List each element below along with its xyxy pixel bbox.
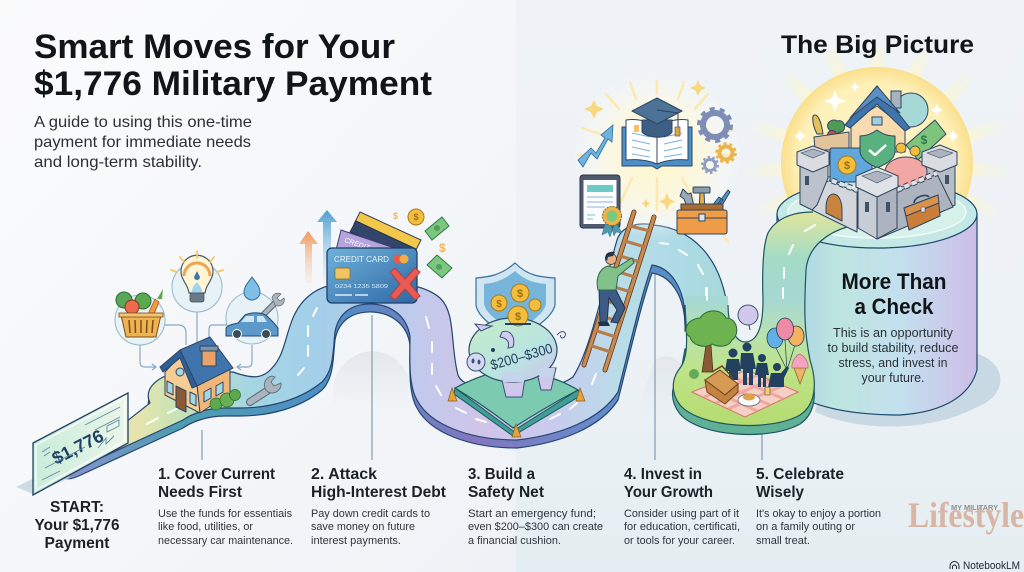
icon: coins and cash: $ bbox=[439, 241, 446, 255]
step 1 illustration: needs bbox=[115, 251, 284, 413]
step 4 text: for education, certificati, bbox=[624, 521, 740, 533]
step 5 illustration: picnic bbox=[686, 305, 808, 417]
icon: groceries circle bbox=[115, 289, 165, 345]
subtitle: payment for immediate needs bbox=[34, 134, 251, 151]
icon: house bbox=[160, 337, 233, 413]
logo: my military lifestyle: MY MILITARY bbox=[951, 505, 998, 512]
right tower top bbox=[922, 145, 957, 184]
step 2 text: save money on future bbox=[311, 521, 415, 533]
step 3 text: a financial cushion. bbox=[468, 535, 561, 547]
step 5 text: on a family outing or bbox=[756, 521, 855, 533]
text: more than a check description: stress, and invest in bbox=[838, 356, 948, 370]
subtitle: A guide to using this one-time bbox=[34, 114, 252, 131]
glow rays bbox=[578, 81, 736, 242]
icon: utility bulb bbox=[171, 251, 223, 312]
step 3 text: Start an emergency fund; bbox=[468, 508, 596, 520]
castle walls bbox=[812, 176, 857, 232]
step 2 illustration: credit cards bbox=[299, 209, 452, 303]
step 3 text bbox=[468, 466, 603, 547]
step 5 text bbox=[756, 466, 881, 547]
title bbox=[34, 28, 432, 103]
icon: toolbox bbox=[677, 187, 730, 234]
road: picnic bend rising to the castle bbox=[672, 212, 847, 434]
text: more than a check description: your future. bbox=[862, 371, 924, 385]
shield on castle bbox=[860, 130, 895, 168]
icon: shield bbox=[476, 263, 555, 340]
icon: red x bbox=[390, 268, 420, 300]
title: $1,776 Military Payment bbox=[34, 65, 432, 103]
step 1 text: 1. Cover Current bbox=[158, 466, 275, 483]
icon: basket and food bbox=[705, 366, 770, 406]
arrows into house bbox=[140, 312, 252, 370]
road: winding path bbox=[65, 224, 728, 479]
heading: more than a check: a Check bbox=[854, 294, 934, 319]
blue balloon and cash bbox=[894, 93, 946, 160]
icon: graduation cap bbox=[632, 98, 682, 137]
icon: open book bbox=[622, 119, 692, 169]
icon: speech bubble bbox=[738, 305, 758, 330]
icon: picnic blanket bbox=[692, 370, 798, 417]
icon: family silhouettes bbox=[725, 342, 789, 387]
icon: car and water bbox=[226, 277, 284, 344]
step 1 text: necessary car maintenance. bbox=[158, 535, 293, 547]
step 5 text: 5. Celebrate bbox=[756, 466, 844, 483]
notebooklm mark: NotebookLM bbox=[963, 560, 1020, 572]
icon: sparkles bbox=[584, 80, 706, 210]
icon: piggy bank: $ bbox=[515, 311, 521, 323]
step 5 text: small treat. bbox=[756, 535, 810, 547]
step 2 text: 2. Attack bbox=[311, 466, 377, 483]
title: Smart Moves for Your bbox=[34, 28, 395, 66]
icon: coins and cash: $ bbox=[413, 212, 419, 222]
house on top bbox=[845, 86, 910, 152]
icon: coins and cash bbox=[393, 209, 452, 278]
icon: pillow bbox=[448, 368, 585, 437]
text: more than a check description: to build stability, reduce bbox=[828, 341, 959, 355]
blue balloon and cash: $ bbox=[921, 133, 928, 147]
step 5 text: It's okay to enjoy a portion bbox=[756, 508, 881, 520]
icon: cheque: $1,776 bbox=[49, 426, 107, 469]
step 4 text: or tools for your career. bbox=[624, 535, 735, 547]
icon: tablet certificate bbox=[580, 175, 622, 237]
step 4 text: Your Growth bbox=[624, 484, 713, 501]
blue panel with coin bbox=[830, 148, 872, 182]
step 4 text: Consider using part of it bbox=[624, 508, 739, 520]
icon: gears bbox=[699, 109, 736, 173]
back right tower bbox=[925, 165, 955, 215]
icon: cheque bbox=[16, 393, 128, 495]
step 4 illustration: growth bbox=[572, 70, 742, 370]
icon: shield: $ bbox=[517, 288, 523, 300]
icon: piggy bank bbox=[467, 306, 565, 397]
icon: credit card front bbox=[327, 248, 417, 303]
icon: tree bbox=[686, 311, 737, 379]
icon: piggy bank: $200–$300 bbox=[488, 340, 555, 373]
heading: more than a check bbox=[842, 269, 946, 319]
icon: balloons and ice cream bbox=[767, 318, 808, 384]
icon: rising arrows bbox=[299, 210, 337, 283]
icon: growth arrow bbox=[578, 125, 613, 167]
step 3 text: 3. Build a bbox=[468, 466, 535, 483]
step 1 text: Needs First bbox=[158, 484, 242, 501]
sun glow behind castle bbox=[742, 45, 1012, 259]
text: more than a check description bbox=[828, 326, 959, 385]
step: start label bbox=[34, 499, 120, 552]
step 3 illustration: safety net bbox=[448, 263, 585, 437]
front tower bbox=[856, 167, 898, 239]
text: more than a check description: This is an opportunity bbox=[833, 326, 954, 340]
icon: castle with everything protected bbox=[797, 86, 957, 239]
step 1 text bbox=[158, 466, 293, 547]
pig bbox=[885, 157, 927, 187]
step 3 text: even $200–$300 can create bbox=[468, 521, 603, 533]
step 2 text: High-Interest Debt bbox=[311, 484, 446, 501]
step 2 illustration: credit cards: CREDIT bbox=[343, 237, 371, 252]
subtitle: and long-term stability. bbox=[34, 154, 202, 171]
icon: back cards bbox=[354, 212, 421, 252]
subtitle bbox=[34, 114, 252, 171]
left tower bbox=[797, 146, 829, 210]
step 4 text: 4. Invest in bbox=[624, 466, 702, 483]
icon: credit card front: CREDIT CARD bbox=[334, 254, 389, 264]
step 2 text bbox=[311, 466, 446, 547]
step: start label: START: bbox=[50, 499, 104, 516]
blue panel with coin: $ bbox=[844, 160, 850, 172]
heading: the big picture: The Big Picture bbox=[781, 31, 974, 59]
step: start label: Your $1,776 bbox=[34, 517, 120, 534]
icon: bushes and wrench bbox=[210, 376, 281, 410]
step 5 text: Wisely bbox=[756, 484, 804, 501]
icon: credit card front: 0234 1235 5809 bbox=[335, 284, 388, 290]
briefcase bbox=[904, 195, 940, 230]
step 4 text bbox=[624, 466, 740, 547]
icon: coins and cash: $ bbox=[393, 211, 398, 221]
step 3 text: Safety Net bbox=[468, 484, 544, 501]
connector lines from road to steps bbox=[202, 262, 762, 460]
step: start label: Payment bbox=[44, 535, 110, 552]
step 2 text: Pay down credit cards to bbox=[311, 508, 430, 520]
step 1 text: like food, utilities, or bbox=[158, 521, 253, 533]
panel: more than a check cylinder bbox=[777, 180, 1000, 427]
icon: person climbing and ladder bbox=[584, 212, 654, 370]
icon: shield: $ bbox=[496, 299, 502, 310]
bag of groceries bbox=[813, 115, 849, 150]
step 2 text: interest payments. bbox=[311, 535, 401, 547]
step 1 text: Use the funds for essentiais bbox=[158, 508, 293, 520]
heading: more than a check: More Than bbox=[842, 269, 946, 294]
